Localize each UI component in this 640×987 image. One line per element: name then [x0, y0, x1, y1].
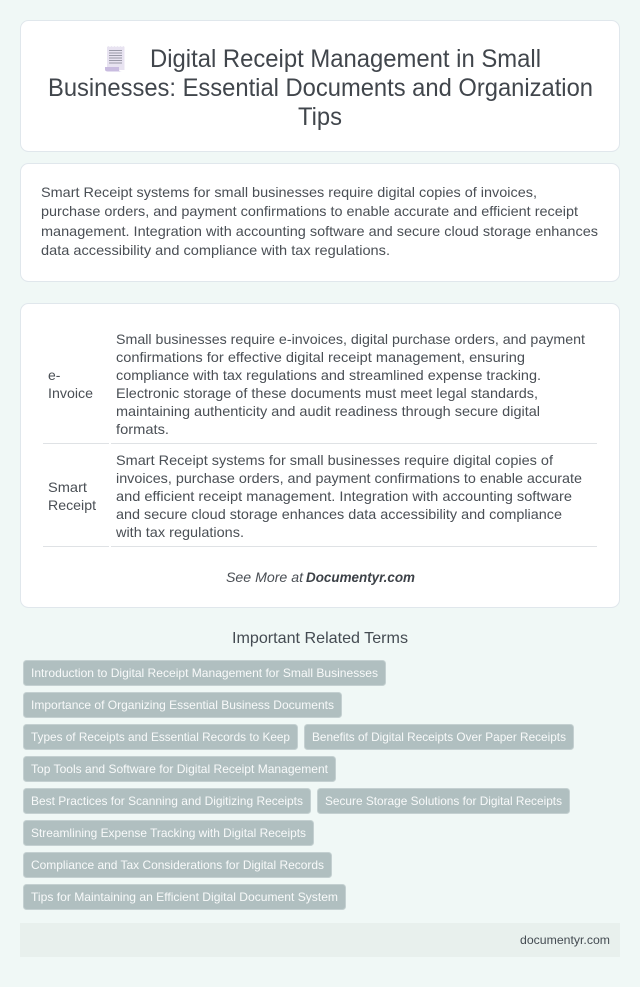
tag: Types of Receipts and Essential Records to Keep [31, 730, 290, 744]
tag [24, 852, 332, 878]
see more link: See More at [226, 569, 304, 585]
tag: Tips for Maintaining an Efficient Digital Document System [31, 890, 338, 904]
tag [24, 820, 314, 846]
summary paragraph: Smart Receipt systems for small businesses require digital copies of invoices, [41, 184, 537, 200]
table row: Smart Receipt: with tax regulations. [115, 524, 244, 540]
table row: e-Invoice: maintaining authenticity and audit readiness through secure digital [116, 403, 540, 419]
table row: Smart Receipt [48, 452, 582, 540]
summary paragraph: data accessibility and compliance with tax regulations. [41, 242, 390, 258]
tag: Importance of Organizing Essential Business Documents [31, 698, 334, 712]
tag list [24, 660, 574, 910]
tag [24, 692, 342, 718]
tag [304, 724, 574, 750]
summary paragraph [41, 184, 598, 258]
tag: Top Tools and Software for Digital Receipt Management [31, 762, 329, 776]
table row: Smart Receipt: Smart [48, 479, 87, 495]
tag [24, 884, 346, 910]
panel: summary card [20, 164, 620, 282]
summary paragraph: management. Integration with accounting software and secure cloud storage enhances [41, 223, 598, 239]
title: Digital Receipt Management in Small [150, 45, 541, 73]
tag: Compliance and Tax Considerations for Digital Records [31, 858, 324, 872]
table row: e-Invoice: e- [48, 367, 61, 383]
title: Businesses: Essential Documents and Organization [48, 74, 593, 102]
tag [24, 756, 336, 782]
summary paragraph: purchase orders, and payment confirmations to enable accurate and efficient receipt [41, 203, 578, 219]
see more link [226, 569, 415, 585]
table row: Smart Receipt: and secure cloud storage enhances data accessibility and compliance [116, 506, 562, 522]
table row: Smart Receipt: invoices, purchase orders, and payment confirmations to enable accurate [116, 470, 582, 486]
table row: Smart Receipt: Receipt [48, 497, 96, 513]
heading: important related terms: Important Related Terms [232, 630, 408, 647]
panel: title card [20, 20, 620, 152]
table row: e-Invoice: confirmations for effective digital receipt management, ensuring [116, 349, 525, 365]
table row: e-Invoice: Invoice [48, 385, 93, 401]
table row: e-Invoice: compliance with tax regulations and streamlined expense tracking. [116, 367, 541, 383]
table row: Smart Receipt: and efficient receipt management. Integration with accounting software [116, 488, 572, 504]
table row: e-Invoice [48, 331, 585, 437]
footer bar: documentyr.com [520, 933, 610, 947]
tag [318, 788, 570, 814]
tag: Introduction to Digital Receipt Management for Small Businesses [31, 666, 378, 680]
table row: e-Invoice: Electronic storage of these documents must meet legal standards, [116, 385, 538, 401]
tag: Best Practices for Scanning and Digitizing Receipts [31, 794, 303, 808]
footer bar [20, 923, 620, 957]
tag: Streamlining Expense Tracking with Digital Receipts [31, 826, 306, 840]
title [48, 45, 593, 131]
see more link: Documentyr.com [306, 569, 415, 585]
tag: Benefits of Digital Receipts Over Paper Receipts [312, 730, 566, 744]
tag [24, 660, 386, 686]
icon: receipt scroll [105, 46, 124, 72]
title: Tips [298, 103, 342, 131]
tag [24, 788, 310, 814]
tag: Secure Storage Solutions for Digital Receipts [325, 794, 562, 808]
tag [24, 724, 298, 750]
panel: document table card [20, 304, 620, 608]
table row: e-Invoice: Small businesses require e-invoices, digital purchase orders, and payment [116, 331, 585, 347]
table row: Smart Receipt: Smart Receipt systems for small businesses require digital copies of [116, 452, 553, 468]
table row: e-Invoice: formats. [116, 421, 169, 437]
